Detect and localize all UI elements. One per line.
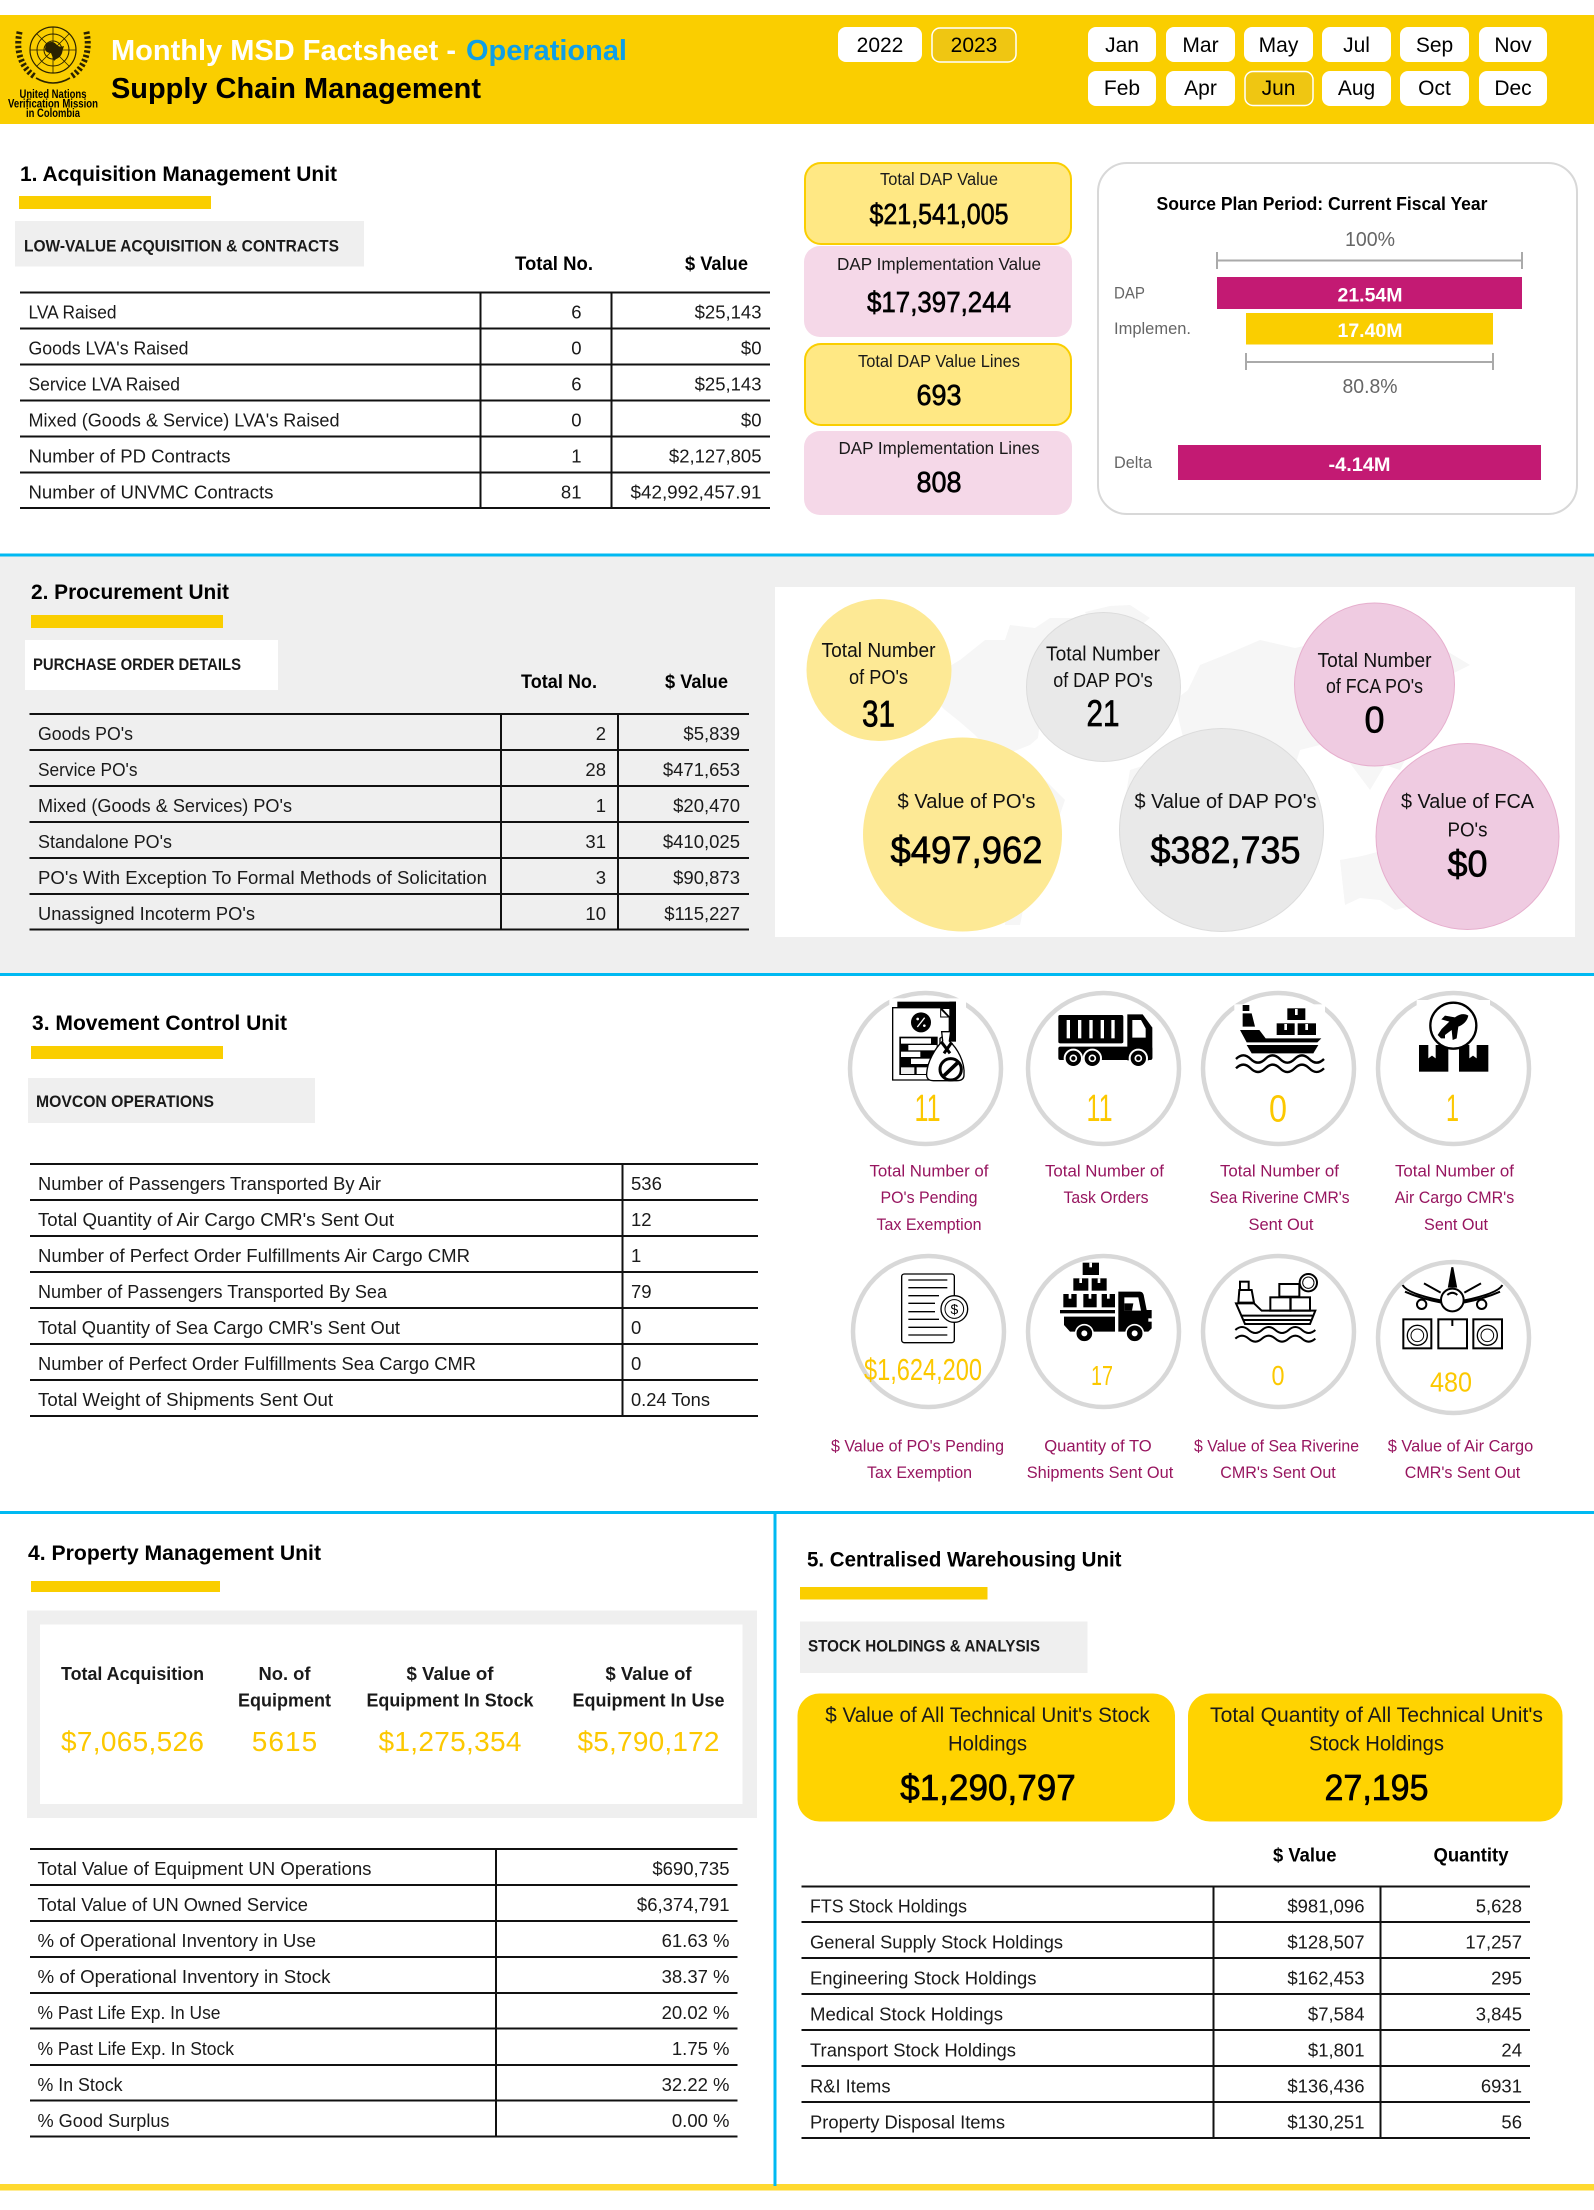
table: movcon operations: Total Quantity of Sea Cargo CMR's Sent Out — [38, 1317, 400, 1338]
table: LVA and contracts: $42,992,457.91 — [630, 482, 762, 502]
logo caption — [8, 89, 98, 120]
bubble: value of POs: $ Value of PO's — [898, 791, 1036, 813]
caption: Shipments Sent Out — [1027, 1463, 1174, 1482]
KPI card: total quantity of stock holdings — [1188, 1694, 1562, 1822]
caption — [1194, 1436, 1359, 1482]
table: purchase orders: $20,470 — [673, 795, 740, 816]
value: 0 — [1272, 1360, 1284, 1391]
value: 17 — [1091, 1360, 1113, 1391]
table: stock holdings: 24 — [1501, 2040, 1522, 2060]
icon: document with dollar coin — [902, 1274, 968, 1343]
caption — [1027, 1436, 1174, 1482]
table: purchase orders: Service PO's — [38, 759, 138, 780]
table: purchase orders: $ Value — [665, 672, 728, 693]
bubble: value of FCA POs: $0 — [1448, 844, 1488, 884]
table: stock holdings: $130,251 — [1287, 2112, 1364, 2132]
month slicer: Dec — [1494, 77, 1532, 100]
subheading: low-value acquisition — [15, 221, 364, 266]
KPI card: value of stock holdings: $1,290,797 — [900, 1767, 1076, 1808]
table: LVA and contracts: $ Value — [685, 254, 748, 275]
KPI card: DAP implementation value — [804, 246, 1072, 337]
stat: number of equipment: 5615 — [252, 1726, 317, 1757]
title — [111, 35, 627, 105]
table: purchase orders: $5,839 — [683, 723, 740, 744]
table: stock holdings: $7,584 — [1308, 2004, 1364, 2024]
bracket: 80.8% — [1246, 353, 1493, 398]
stat: number of equipment: No. of — [258, 1663, 311, 1684]
stat: value of equipment in use: Equipment In Use — [572, 1690, 724, 1710]
caption: Task Orders — [1064, 1188, 1148, 1207]
title: Supply Chain Management — [111, 73, 481, 105]
KPI card: total quantity of stock holdings: 27,195 — [1324, 1767, 1428, 1808]
panel: purchase order bubbles over world map — [775, 587, 1575, 937]
table: purchase orders: 3 — [596, 867, 606, 888]
caption: PO's Pending — [880, 1188, 978, 1207]
table: stock holdings: $ Value — [1273, 1846, 1336, 1866]
caption — [1045, 1162, 1164, 1207]
heading: section 2: 2. Procurement Unit — [31, 581, 229, 604]
table: movcon operations: 0 — [631, 1353, 641, 1374]
table: LVA and contracts: 6 — [571, 302, 582, 322]
table: LVA and contracts: 81 — [561, 482, 582, 502]
caption: $ Value of Sea Riverine — [1194, 1436, 1359, 1456]
table: property metrics: Total Value of UN Owned Service — [38, 1894, 308, 1915]
table: property metrics: 38.37 % — [662, 1966, 730, 1987]
table: movcon operations: 0 — [631, 1317, 641, 1338]
panel: source plan period chart — [1098, 163, 1577, 514]
table: LVA and contracts: $2,127,805 — [669, 446, 762, 466]
KPI card: DAP implementation lines: 808 — [916, 467, 962, 499]
bubble: value of FCA POs: PO's — [1448, 820, 1488, 842]
KPI card: DAP implementation lines: DAP Implementation Lines — [838, 438, 1040, 458]
caption: Tax Exemption — [867, 1463, 972, 1482]
stat: value of equipment in use: $ Value of — [606, 1663, 692, 1684]
stat: value of equipment in use — [572, 1663, 724, 1757]
bubble: total number of DAP POs: Total Number — [1046, 644, 1160, 666]
table: purchase orders: Total No. — [521, 672, 597, 693]
bubble: total number of FCA POs: Total Number — [1318, 650, 1432, 672]
stat: quantity of TO shipments — [1027, 1256, 1179, 1482]
KPI card: total DAP value: Total DAP Value — [880, 169, 998, 189]
bubble: value of POs: $497,962 — [890, 830, 1042, 872]
stat: value of POs pending tax exemption — [831, 1256, 1004, 1482]
table: purchase orders: $410,025 — [663, 831, 740, 852]
stat: POs pending tax exemption — [850, 993, 1001, 1234]
table: LVA and contracts: 1 — [571, 446, 582, 466]
bar: DAP: 21.54M — [1338, 286, 1402, 306]
table: stock holdings: 5,628 — [1476, 1896, 1522, 1916]
month slicer: May — [1259, 34, 1299, 57]
bubble: total number of FCA POs — [1294, 603, 1454, 766]
table: stock holdings: $981,096 — [1287, 1896, 1364, 1916]
subheading: low-value acquisition: LOW-VALUE ACQUISITION & CONTRACTS — [24, 238, 339, 256]
bracket: 80.8%: 80.8% — [1342, 376, 1398, 398]
bracket: 100% — [1217, 229, 1522, 269]
table: stock holdings: Transport Stock Holdings — [810, 2040, 1016, 2060]
caption: Total Number of — [1045, 1162, 1164, 1180]
caption: Total Number of — [870, 1162, 989, 1180]
table: LVA and contracts: Total No. — [515, 254, 593, 275]
caption — [1395, 1162, 1514, 1234]
title: Operational — [466, 35, 627, 67]
table: LVA and contracts: Number of PD Contracts — [28, 446, 230, 466]
bar: DAP: DAP — [1114, 284, 1145, 302]
table: purchase orders: Unassigned Incoterm PO's — [38, 903, 255, 924]
table: stock holdings: R&I Items — [810, 2076, 890, 2096]
table: purchase orders: $90,873 — [673, 867, 740, 888]
month slicer: Aug — [1338, 77, 1375, 100]
bubble: value of DAP POs: $382,735 — [1150, 830, 1300, 872]
caption: Sent Out — [1424, 1215, 1488, 1234]
KPI card: total DAP value lines: Total DAP Value Lines — [858, 351, 1020, 371]
table: movcon operations: 0.24 Tons — [631, 1389, 710, 1410]
table: LVA and contracts: Mixed (Goods & Service) LVA's Raised — [28, 410, 340, 430]
table: LVA and contracts: 6 — [571, 374, 582, 394]
table: movcon operations: Number of Perfect Order Fulfillments Air Cargo CMR — [38, 1245, 470, 1266]
subheading: movcon operations: MOVCON OPERATIONS — [36, 1093, 214, 1111]
table: property metrics: $6,374,791 — [637, 1894, 730, 1915]
month slicer: Jun — [1262, 77, 1295, 100]
icon: UN emblem logo — [18, 27, 88, 83]
table: LVA and contracts: 0 — [571, 338, 582, 358]
section 5: centralised warehousing unit — [798, 1548, 1562, 2138]
table: purchase orders: Standalone PO's — [38, 831, 172, 852]
table: movcon operations: Number of Passengers Transported By Sea — [38, 1281, 388, 1302]
table: stock holdings — [802, 1846, 1530, 2138]
caption: $ Value of PO's Pending — [831, 1436, 1004, 1456]
stat: value of sea riverine CMRs — [1194, 1256, 1359, 1482]
caption: CMR's Sent Out — [1220, 1463, 1336, 1482]
bubble: value of POs — [863, 738, 1062, 932]
bubble: value of FCA POs — [1376, 744, 1559, 930]
table: LVA and contracts: Goods LVA's Raised — [28, 338, 188, 358]
icon: loaded truck — [1060, 1263, 1152, 1342]
bar: delta: -4.14M — [1328, 455, 1390, 476]
month slicer: Mar — [1182, 34, 1219, 57]
month slicer: Oct — [1418, 77, 1451, 100]
KPI card: DAP implementation value: $17,397,244 — [867, 287, 1011, 319]
stat: value of equipment in stock: $1,275,354 — [378, 1726, 522, 1757]
bar: implementation: 17.40M — [1338, 321, 1402, 342]
value: 11 — [1086, 1088, 1112, 1130]
table: stock holdings: $136,436 — [1287, 2076, 1364, 2096]
caption: Sent Out — [1248, 1215, 1314, 1234]
stat: value of equipment in stock: Equipment In Stock — [366, 1690, 534, 1710]
chart title: Source Plan Period: Current Fiscal Year — [1156, 193, 1488, 214]
subheading: movcon operations — [28, 1078, 315, 1123]
section 1: acquisition management unit — [15, 163, 1577, 515]
table: stock holdings: Medical Stock Holdings — [810, 2004, 1003, 2024]
table: property metrics: % In Stock — [38, 2074, 123, 2095]
month slicer: Apr — [1184, 77, 1217, 100]
caption: $ Value of Air Cargo — [1388, 1436, 1533, 1456]
caption: Quantity of TO — [1044, 1436, 1152, 1456]
section 2: procurement unit — [0, 554, 1594, 976]
table: movcon operations: 536 — [631, 1173, 662, 1194]
table: property metrics: 1.75 % — [672, 2038, 730, 2059]
KPI card: DAP implementation lines — [804, 431, 1072, 515]
table: property metrics: $690,735 — [652, 1858, 730, 1879]
value: 1 — [1446, 1088, 1459, 1130]
table: LVA and contracts: 0 — [571, 410, 582, 430]
table: property metrics — [30, 1849, 738, 2136]
year slicer: 2023 — [951, 34, 997, 57]
month slicer: Sep — [1416, 34, 1453, 57]
icon: document with dollar coin: $ — [950, 1301, 958, 1317]
table: purchase orders: 31 — [585, 831, 606, 852]
caption — [831, 1436, 1004, 1482]
table: stock holdings: $162,453 — [1287, 1968, 1364, 1988]
panel: equipment totals — [27, 1610, 757, 1818]
table: property metrics: Total Value of Equipment UN Operations — [38, 1858, 372, 1879]
bubble: value of DAP POs: $ Value of DAP PO's — [1134, 791, 1316, 813]
bar: implementation: Implemen. — [1114, 320, 1191, 338]
table: LVA and contracts: LVA Raised — [28, 302, 116, 322]
bubble: total number of DAP POs — [1026, 612, 1180, 762]
header banner — [0, 15, 1594, 124]
table: LVA and contracts: $25,143 — [695, 302, 762, 322]
table: movcon operations: 1 — [631, 1245, 641, 1266]
value: 0 — [1269, 1088, 1287, 1130]
section 4: property management unit — [27, 1542, 757, 2136]
table: stock holdings: $1,801 — [1308, 2040, 1364, 2060]
stat: total acquisition: Total Acquisition — [61, 1663, 204, 1684]
table: purchase orders: 2 — [596, 723, 606, 744]
table: stock holdings: $128,507 — [1287, 1932, 1364, 1952]
subheading: purchase order details — [25, 640, 278, 690]
stat: value of equipment in stock: $ Value of — [406, 1663, 494, 1684]
table: movcon operations: 12 — [631, 1209, 652, 1230]
world map background — [925, 605, 1470, 925]
bubble: value of DAP POs — [1120, 728, 1324, 932]
table: purchase orders: 1 — [596, 795, 606, 816]
table: movcon operations: 79 — [631, 1281, 652, 1302]
month slicer: Nov — [1494, 34, 1532, 57]
icon: container truck — [1058, 1014, 1152, 1067]
table: purchase orders: $471,653 — [663, 759, 740, 780]
caption: Total Number of — [1220, 1162, 1339, 1180]
table: LVA and contracts — [20, 254, 770, 508]
bubble: total number of DAP POs: 21 — [1086, 693, 1120, 734]
year slicer — [838, 27, 1016, 62]
bar: DAP — [1114, 277, 1522, 309]
subheading: stock holdings: STOCK HOLDINGS & ANALYSIS — [808, 1638, 1040, 1656]
stat: total acquisition — [61, 1663, 204, 1757]
table: stock holdings: 17,257 — [1465, 1932, 1522, 1952]
subheading: stock holdings — [800, 1622, 1088, 1673]
heading: section 3: 3. Movement Control Unit — [32, 1012, 287, 1035]
icon: outlined cargo ship with coin — [1235, 1274, 1317, 1342]
table: property metrics: % Past Life Exp. In Use — [38, 2002, 220, 2023]
table: purchase orders: $115,227 — [664, 903, 740, 924]
bubble: total number of FCA POs: of FCA PO's — [1326, 676, 1423, 698]
table: purchase orders: 10 — [585, 903, 606, 924]
KPI card: total quantity of stock holdings: Stock Holdings — [1309, 1732, 1444, 1756]
stat: air cargo CMRs — [1378, 993, 1529, 1234]
icon: airplane with boxes and coins — [1403, 1267, 1502, 1348]
table: stock holdings: FTS Stock Holdings — [810, 1896, 967, 1916]
stat: value of equipment in stock — [366, 1663, 534, 1757]
table: property metrics: 61.63 % — [662, 1930, 730, 1951]
caption: CMR's Sent Out — [1405, 1463, 1521, 1482]
table: purchase orders: Goods PO's — [38, 723, 133, 744]
bar: implementation — [1114, 313, 1493, 344]
caption: Tax Exemption — [876, 1215, 982, 1234]
stat: task orders — [1028, 993, 1179, 1207]
stat: value of air cargo CMRs — [1378, 1262, 1533, 1482]
table: stock holdings: 56 — [1501, 2112, 1522, 2132]
table: LVA and contracts: Number of UNVMC Contracts — [28, 482, 274, 502]
table: stock holdings: Quantity — [1434, 1846, 1509, 1866]
table: property metrics: 20.02 % — [662, 2002, 730, 2023]
bubble: total number of FCA POs: 0 — [1364, 700, 1384, 740]
table: LVA and contracts: $0 — [741, 410, 762, 430]
section 3: movement control unit — [28, 993, 1533, 1482]
caption: Sea Riverine CMR's — [1210, 1188, 1350, 1207]
table: movcon operations: Total Quantity of Air Cargo CMR's Sent Out — [38, 1209, 394, 1230]
table: movcon operations: Total Weight of Shipments Sent Out — [38, 1389, 333, 1410]
KPI card: total DAP value lines — [805, 344, 1071, 425]
table: stock holdings: Property Disposal Items — [810, 2112, 1005, 2132]
caption: Total Number of — [1395, 1162, 1514, 1180]
table: stock holdings: General Supply Stock Holdings — [810, 1932, 1063, 1952]
month slicer: Jul — [1343, 34, 1370, 57]
KPI card: total quantity of stock holdings: Total Quantity of All Technical Unit's — [1210, 1704, 1543, 1727]
table: LVA and contracts: $25,143 — [695, 374, 762, 394]
KPI card: value of stock holdings — [798, 1694, 1175, 1822]
heading: section 5: 5. Centralised Warehousing Unit — [807, 1548, 1122, 1572]
logo caption: Verification Mission — [8, 98, 98, 110]
icon: document with tax bag — [889, 998, 966, 1085]
bar: delta — [1114, 445, 1541, 480]
stat: total acquisition: $7,065,526 — [61, 1726, 204, 1757]
table: movcon operations: Number of Perfect Order Fulfillments Sea Cargo CMR — [38, 1353, 476, 1374]
table: property metrics: % Past Life Exp. In Stock — [38, 2038, 235, 2059]
table: LVA and contracts: $0 — [741, 338, 762, 358]
value: 480 — [1430, 1366, 1472, 1398]
table: LVA and contracts: Service LVA Raised — [28, 374, 180, 394]
table: purchase orders: Mixed (Goods & Services) PO's — [38, 795, 292, 816]
table: stock holdings: 6931 — [1481, 2076, 1522, 2096]
bracket: 100%: 100% — [1345, 229, 1395, 251]
year slicer: 2022 — [857, 34, 903, 57]
caption — [870, 1162, 989, 1234]
value: $1,624,200 — [864, 1352, 982, 1387]
table: property metrics: % Good Surplus — [38, 2110, 170, 2131]
heading: section 4: 4. Property Management Unit — [28, 1542, 321, 1565]
logo caption: United Nations — [20, 89, 86, 101]
KPI card: total DAP value lines: 693 — [916, 380, 962, 412]
table: stock holdings: 3,845 — [1476, 2004, 1522, 2024]
stat: value of equipment in use: $5,790,172 — [578, 1726, 720, 1757]
stat: sea riverine CMRs — [1203, 993, 1354, 1234]
table: property metrics: 0.00 % — [672, 2110, 730, 2131]
caption — [1388, 1436, 1533, 1482]
bubble: total number of POs — [806, 599, 952, 741]
KPI card: total DAP value — [805, 163, 1071, 244]
table: purchase orders: PO's With Exception To Formal Methods of Solicitation — [38, 867, 487, 888]
KPI card: value of stock holdings: Holdings — [948, 1732, 1027, 1756]
table: stock holdings: Engineering Stock Holdings — [810, 1968, 1036, 1988]
stat: number of equipment — [238, 1663, 331, 1757]
table: purchase orders — [30, 672, 749, 930]
bubble: total number of POs: Total Number — [822, 640, 936, 662]
bubble: value of FCA POs: $ Value of FCA — [1401, 791, 1535, 813]
bubble: total number of POs: of PO's — [849, 667, 908, 689]
value: 11 — [914, 1088, 940, 1130]
subheading: purchase order details: PURCHASE ORDER DETAILS — [33, 656, 241, 674]
caption — [1210, 1162, 1350, 1234]
table: property metrics: % of Operational Inventory in Use — [38, 1930, 316, 1951]
logo caption: in Colombia — [26, 108, 80, 120]
heading: section 1: 1. Acquisition Management Unit — [20, 163, 337, 186]
KPI card: total DAP value: $21,541,005 — [870, 199, 1008, 231]
table: movcon operations: Number of Passengers Transported By Air — [38, 1173, 381, 1194]
title: Monthly MSD Factsheet - — [111, 35, 456, 67]
caption: Air Cargo CMR's — [1395, 1188, 1514, 1207]
table: property metrics: 32.22 % — [662, 2074, 730, 2095]
table: movcon operations — [30, 1164, 758, 1416]
month slicer: Feb — [1104, 77, 1140, 100]
table: property metrics: % of Operational Inventory in Stock — [38, 1966, 331, 1987]
table: stock holdings: 295 — [1491, 1968, 1522, 1988]
bubble: total number of DAP POs: of DAP PO's — [1053, 670, 1153, 692]
stat: number of equipment: Equipment — [238, 1690, 331, 1710]
month slicer — [1088, 27, 1547, 106]
bubble: total number of POs: 31 — [862, 694, 895, 734]
month slicer: Jan — [1105, 34, 1139, 57]
KPI card: DAP implementation value: DAP Implementation Value — [837, 254, 1041, 274]
icon: cargo ship — [1234, 1004, 1325, 1074]
table: purchase orders: 28 — [585, 759, 606, 780]
KPI card: value of stock holdings: $ Value of All Technical Unit's Stock — [825, 1704, 1150, 1727]
icon: air cargo boxes — [1417, 1000, 1490, 1073]
bar: delta: Delta — [1114, 454, 1153, 472]
